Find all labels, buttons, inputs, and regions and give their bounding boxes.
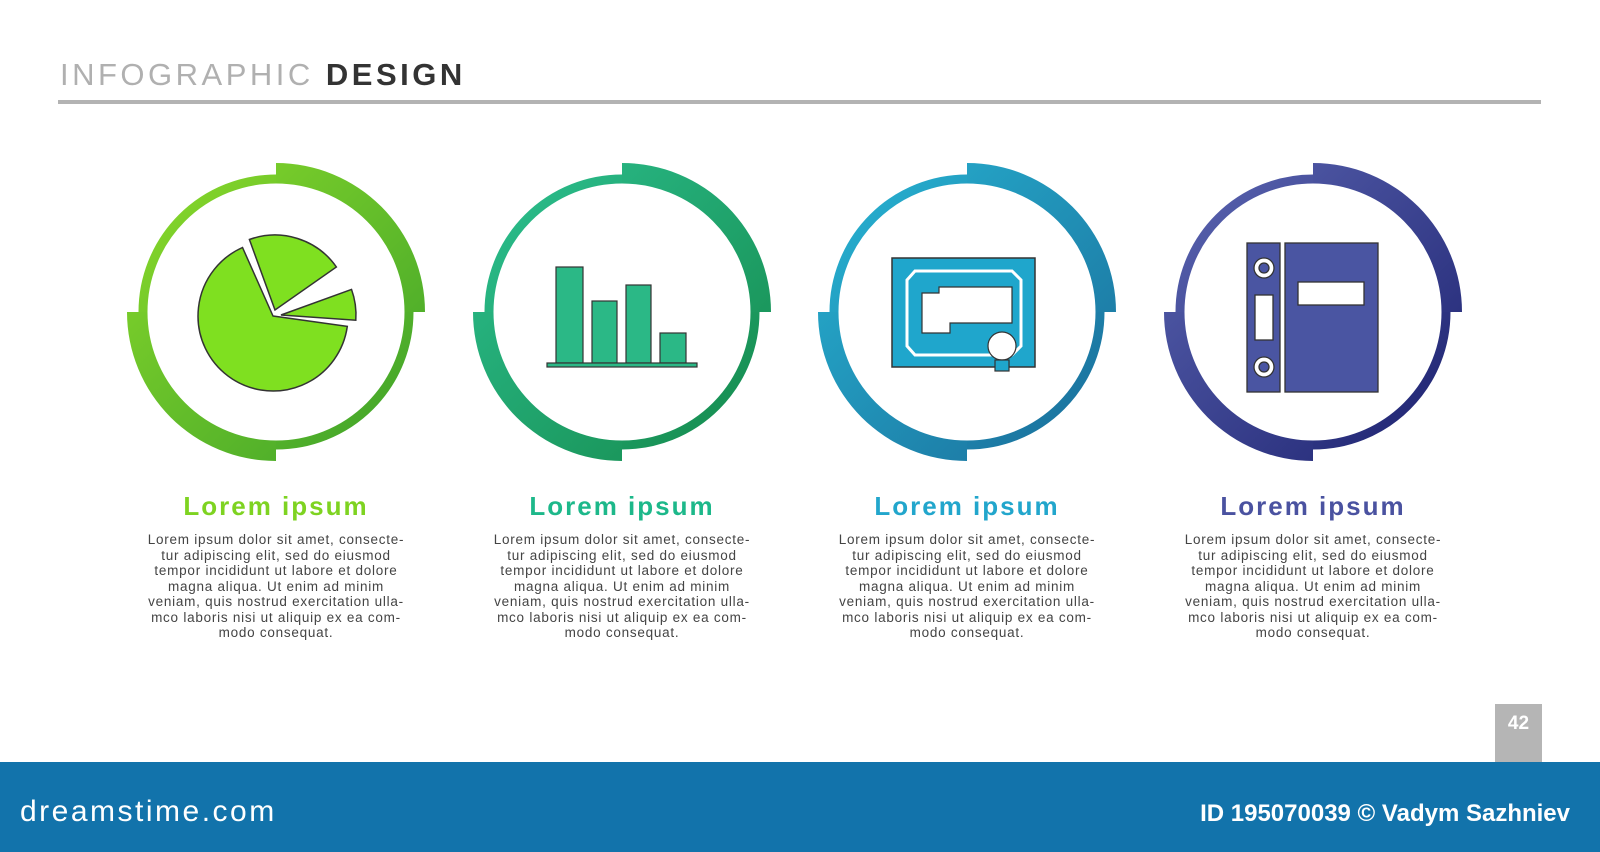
body 1	[148, 532, 404, 640]
body 2	[494, 532, 750, 640]
body 3: mco laboris nisi ut aliquip ex ea com-	[842, 610, 1092, 624]
body 4: Lorem ipsum dolor sit amet, consecte-	[1185, 532, 1441, 547]
icon: binder	[1247, 243, 1378, 392]
body 2: tempor incididunt ut labore et dolore	[500, 563, 744, 578]
body 2: Lorem ipsum dolor sit amet, consecte-	[494, 532, 750, 547]
ring 2	[473, 163, 771, 461]
body 3: tempor incididunt ut labore et dolore	[845, 563, 1089, 578]
body 4: tur adipiscing elit, sed do eiusmod	[1198, 548, 1428, 562]
body 1: mco laboris nisi ut aliquip ex ea com-	[151, 610, 401, 624]
body 2: magna aliqua. Ut enim ad minim	[514, 578, 730, 594]
body 3: Lorem ipsum dolor sit amet, consecte-	[839, 532, 1095, 547]
body 1: tempor incididunt ut labore et dolore	[154, 563, 398, 578]
body 3: tur adipiscing elit, sed do eiusmod	[852, 548, 1082, 562]
body 1: tur adipiscing elit, sed do eiusmod	[161, 548, 391, 562]
footer logo: dreamstime.com	[20, 795, 277, 828]
body 1: magna aliqua. Ut enim ad minim	[168, 578, 384, 594]
ring 1	[127, 163, 425, 461]
page number box	[1495, 704, 1542, 762]
ring 3	[818, 163, 1116, 461]
body 3: magna aliqua. Ut enim ad minim	[859, 578, 1075, 594]
heading 3: Lorem ipsum	[874, 491, 1060, 521]
header title: INFOGRAPHIC DESIGN	[60, 57, 466, 92]
body 2: tur adipiscing elit, sed do eiusmod	[507, 548, 737, 562]
footer bar	[0, 762, 1600, 852]
body 4: tempor incididunt ut labore et dolore	[1191, 563, 1435, 578]
icon: pie chart	[198, 235, 356, 391]
panel 2 text	[494, 491, 750, 640]
body 1: veniam, quis nostrud exercitation ulla-	[148, 594, 404, 609]
panel 3 text	[839, 491, 1095, 640]
heading 2: Lorem ipsum	[529, 491, 715, 521]
heading 4: Lorem ipsum	[1220, 491, 1406, 521]
body 3: modo consequat.	[910, 625, 1024, 640]
body 2: veniam, quis nostrud exercitation ulla-	[494, 594, 750, 609]
heading 1: Lorem ipsum	[183, 491, 369, 521]
panel 1 text	[148, 491, 404, 640]
body 2: mco laboris nisi ut aliquip ex ea com-	[497, 610, 747, 624]
body 2: modo consequat.	[565, 625, 679, 640]
body 3: veniam, quis nostrud exercitation ulla-	[839, 594, 1095, 609]
panel 4 text	[1185, 491, 1441, 640]
icon: bar chart	[547, 267, 697, 367]
body 3	[839, 532, 1095, 640]
body 4: veniam, quis nostrud exercitation ulla-	[1185, 594, 1441, 609]
page number box: 42	[1508, 713, 1529, 734]
footer credit: ID 195070039 © Vadym Sazhniev	[1200, 800, 1570, 827]
body 4: magna aliqua. Ut enim ad minim	[1205, 578, 1421, 594]
ring 4	[1164, 163, 1462, 461]
icon: certificate	[892, 258, 1035, 371]
body 1: modo consequat.	[219, 625, 333, 640]
body 1: Lorem ipsum dolor sit amet, consecte-	[148, 532, 404, 547]
body 4: modo consequat.	[1256, 625, 1370, 640]
body 4	[1185, 532, 1441, 640]
body 4: mco laboris nisi ut aliquip ex ea com-	[1188, 610, 1438, 624]
